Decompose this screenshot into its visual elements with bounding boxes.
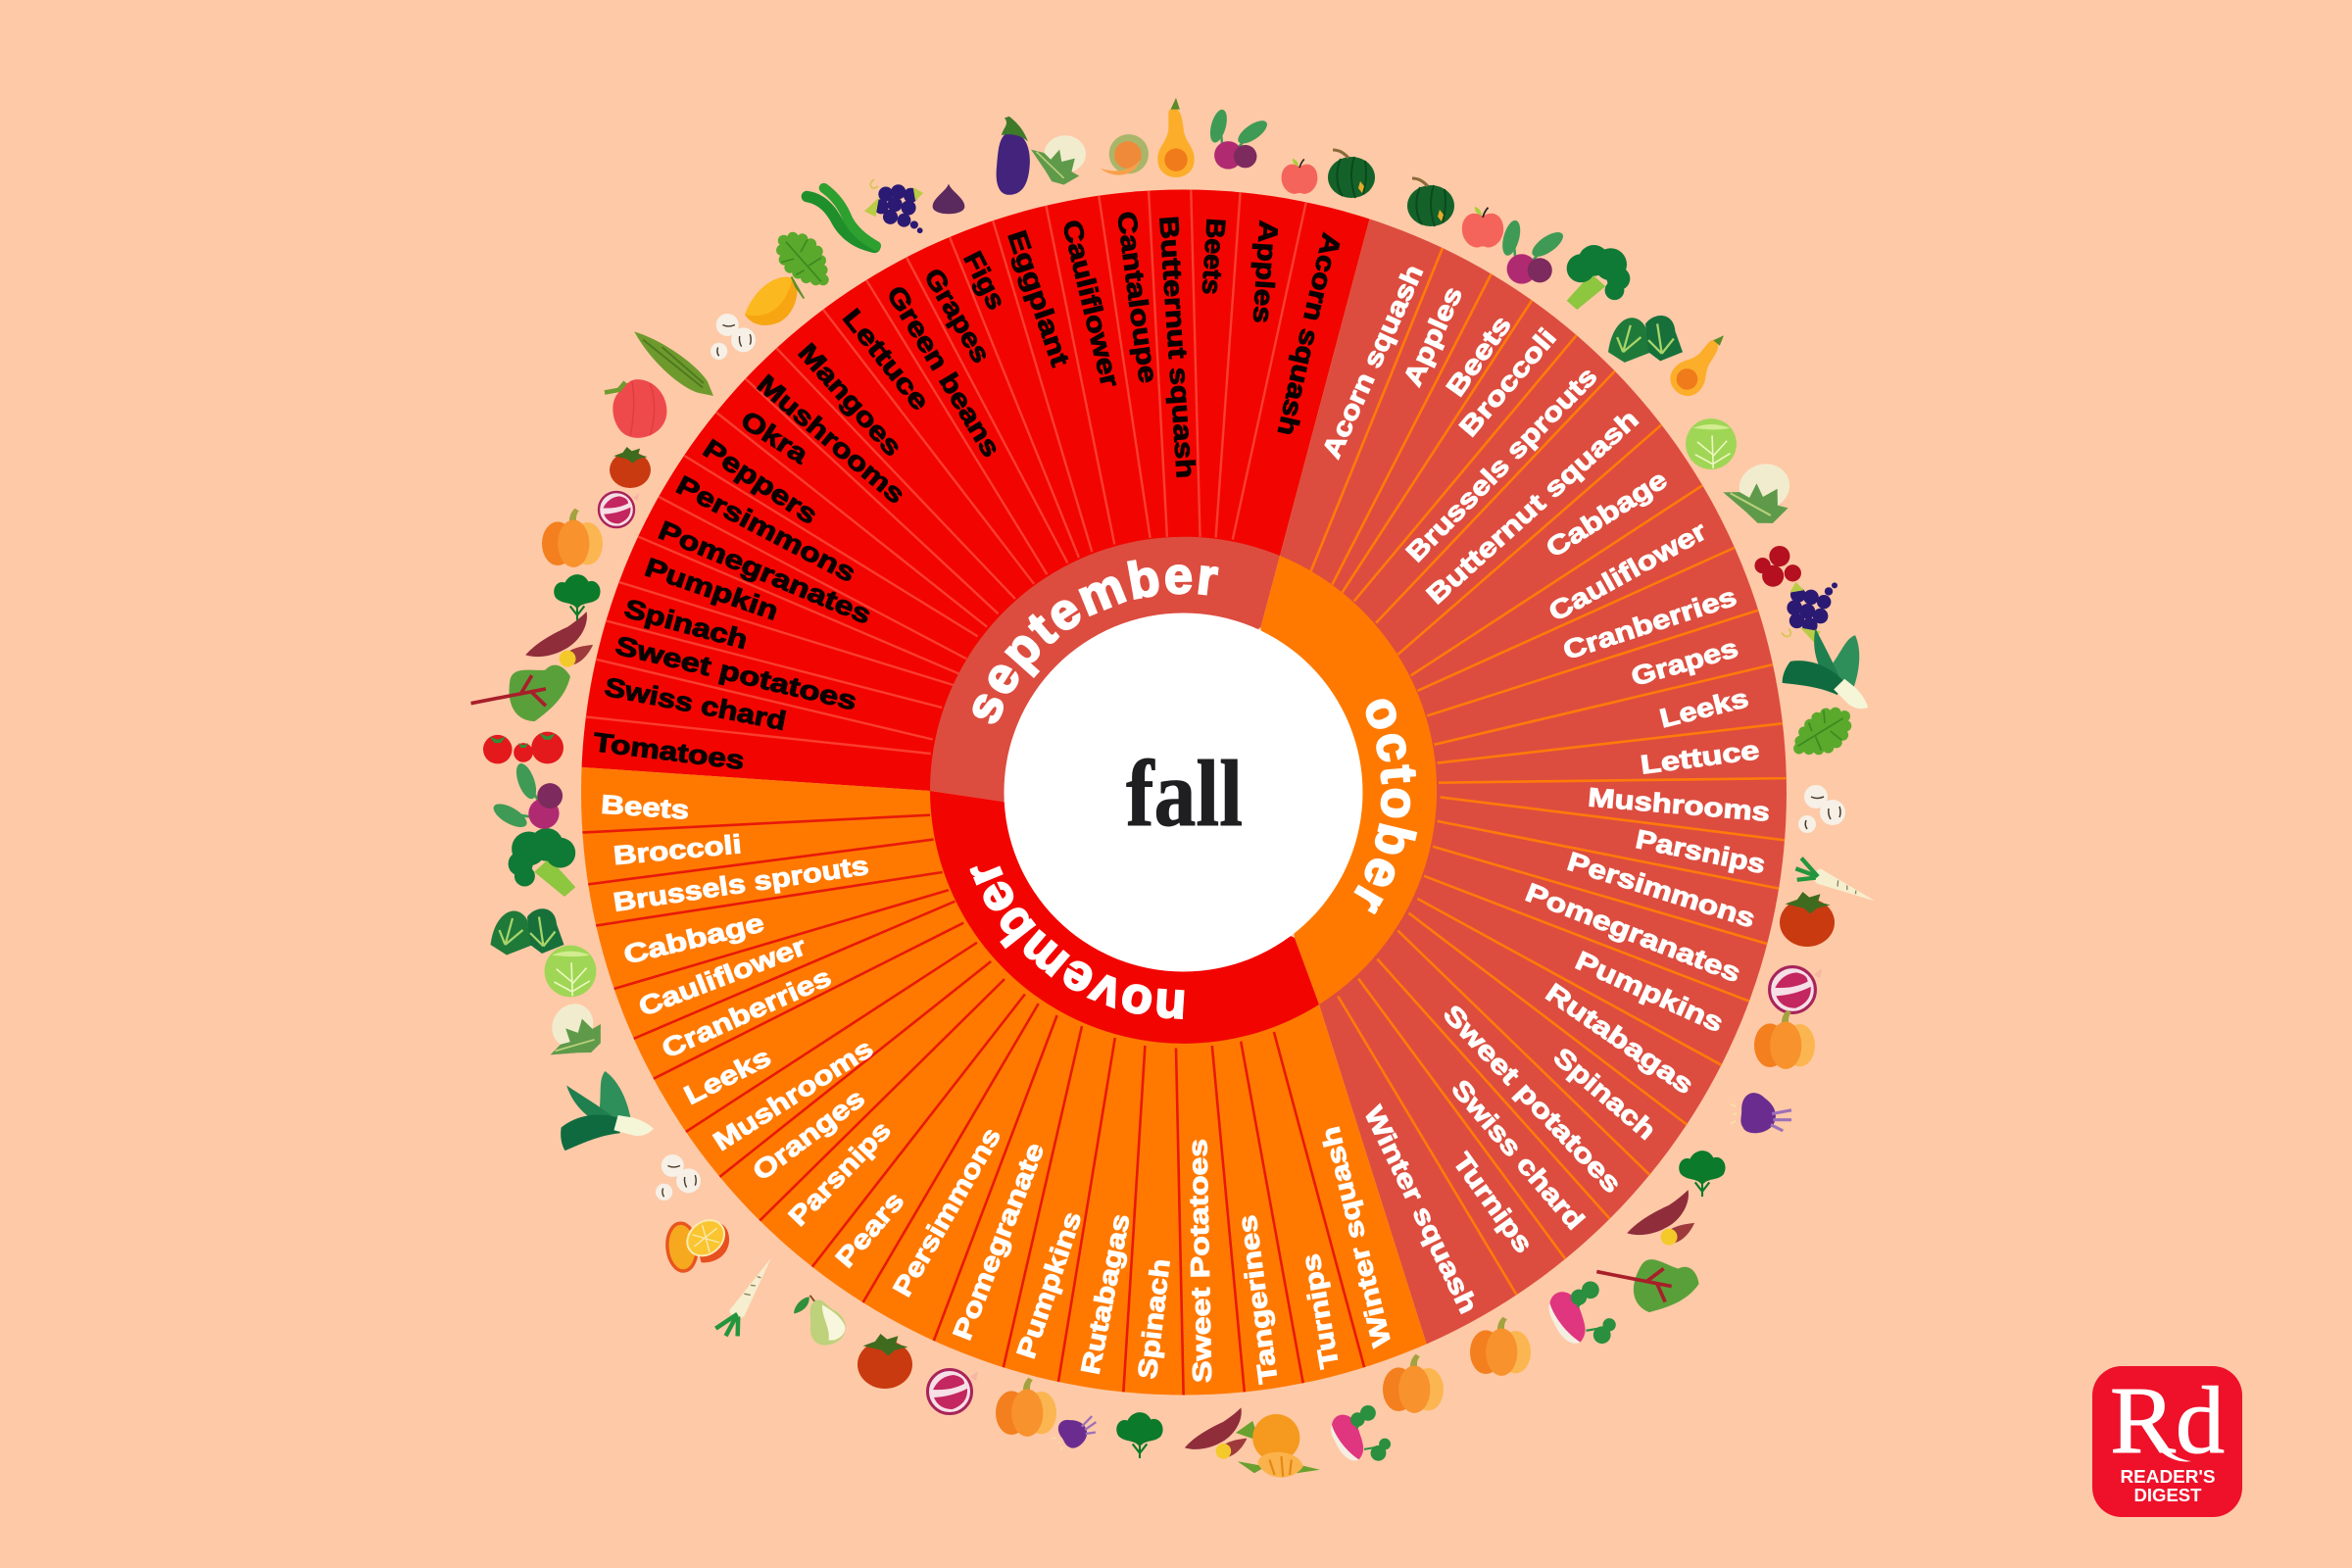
label: Grapes (1628, 633, 1741, 692)
label: Persimmons (887, 1123, 1006, 1301)
icon: swiss chard (1592, 1252, 1701, 1319)
icon: pomegranate (927, 1370, 978, 1413)
icon: rutabaga (1048, 1405, 1102, 1456)
month label: september: september (972, 560, 1219, 724)
icon: apple (1282, 159, 1317, 194)
label: Mangoes (793, 338, 907, 462)
label: Winter squash (1358, 1102, 1484, 1318)
label: Broccoli (612, 829, 743, 870)
icon: pumpkin (542, 509, 603, 567)
icon: cranberries (1754, 546, 1801, 587)
label: Beets (1441, 311, 1517, 402)
month label: october: october (1353, 699, 1417, 915)
label: Lettuce (1639, 735, 1761, 780)
label: Pumpkin (641, 553, 782, 626)
icon: brussels sprouts (490, 908, 564, 955)
icon: turnip (1548, 1281, 1616, 1344)
panel: september wedge (582, 190, 1370, 791)
icon: acorn squash (1407, 178, 1454, 226)
label: Swiss chard (1446, 1074, 1591, 1235)
label: Mushrooms (752, 369, 910, 510)
label: Butternut squash (1153, 216, 1200, 479)
icon: beets (1499, 219, 1567, 284)
label: Oranges (747, 1083, 870, 1187)
label: Persimmons (671, 470, 860, 588)
icon: mango (745, 276, 804, 325)
icon: rutabaga (1731, 1093, 1791, 1133)
logo wordmark line 2: DIGEST (2134, 1486, 2201, 1505)
label: Rutabagas (1541, 977, 1699, 1100)
label: Pomegranate (948, 1139, 1050, 1344)
label: Parsnips (783, 1115, 897, 1232)
november produce labels (600, 790, 1396, 1386)
label: Cauliflower (1544, 515, 1712, 627)
icon: spinach (1679, 1151, 1726, 1197)
label: Pumpkins (1011, 1208, 1087, 1362)
label: Leeks (1657, 683, 1751, 733)
produce icon ring (466, 98, 1893, 1478)
icon: parsnip (714, 1250, 777, 1341)
icon: persimmon (1780, 892, 1835, 947)
label: Tomatoes (592, 727, 746, 775)
icon: sweet potato (1627, 1190, 1694, 1246)
label: Brussels sprouts (1400, 362, 1603, 567)
label: Winter squash (1315, 1124, 1396, 1349)
label: Cranberries (1559, 582, 1740, 665)
label: Figs (957, 247, 1011, 315)
label: Pomegranates (1522, 877, 1744, 988)
icon: pumpkin (996, 1378, 1056, 1437)
icon: beets (1207, 108, 1271, 170)
icon: green beans (807, 188, 876, 247)
icon: sweet potato (1185, 1407, 1247, 1459)
label: Swiss chard (602, 672, 789, 736)
icon: mushrooms (1798, 785, 1845, 833)
label: Peppers (698, 433, 823, 530)
icon: cauliflower (537, 997, 612, 1074)
logo monogram: Rd (2110, 1368, 2225, 1474)
icon: tangerine (1236, 1414, 1320, 1478)
label: Sweet Potatoes (1183, 1139, 1217, 1383)
icon: tomatoes (483, 732, 564, 763)
icon: cantaloupe (1101, 134, 1149, 175)
label: Cantaloupe (1111, 210, 1163, 384)
label: Pears (830, 1186, 909, 1273)
icon: parsnip (1792, 858, 1881, 907)
label: Turnips (1296, 1251, 1345, 1371)
label: Broccoli (1453, 322, 1562, 442)
icon: butternut squash (1664, 324, 1737, 403)
logo badge (2092, 1366, 2242, 1517)
label: Spinach (621, 594, 751, 655)
icon: cabbage (545, 946, 596, 997)
label: Tangerines (1232, 1213, 1283, 1386)
label: Apples (1248, 220, 1284, 324)
label: Cauliflower (1056, 217, 1125, 390)
icon: butternut squash (1157, 98, 1195, 177)
september produce labels (592, 210, 1347, 775)
icon: lettuce (1797, 707, 1848, 756)
logo wordmark line 1: READER'S (2121, 1467, 2215, 1487)
label: Mushrooms (709, 1033, 878, 1156)
icon: acorn squash (1328, 150, 1375, 198)
ring segment: september (930, 537, 1280, 802)
ring segment: october (1260, 556, 1437, 1004)
label: Spinach (1548, 1042, 1661, 1146)
icon: cauliflower (1031, 135, 1086, 185)
panel: november wedge (581, 767, 1427, 1396)
label: Acorn squash (1272, 230, 1347, 438)
icon: grapes (1782, 582, 1838, 643)
label: Brussels sprouts (612, 851, 870, 917)
icon: broccoli (509, 828, 575, 897)
panel: october wedge (1280, 220, 1787, 1345)
icon: pomegranate (1770, 967, 1822, 1012)
label: Apples (1397, 282, 1468, 391)
icon: apple (1462, 207, 1503, 247)
icon: leeks (1780, 614, 1893, 720)
october produce labels (1316, 261, 1771, 1318)
icon: broccoli (1567, 245, 1630, 310)
label: Lettuce (837, 303, 935, 416)
label: Pumpkins (1571, 946, 1728, 1038)
icon: beets (487, 756, 570, 840)
label: Beets (600, 790, 690, 825)
icon: pumpkin (1754, 1010, 1815, 1069)
center circle (1004, 613, 1362, 972)
icon: brussels sprouts (1608, 316, 1683, 363)
label: Cranberries (658, 962, 836, 1064)
produce wheel (581, 190, 1787, 1396)
label: Mushrooms (1587, 782, 1771, 827)
label: Rutabagas (1075, 1211, 1136, 1377)
icon: pomegranate (599, 492, 639, 527)
icon: lettuce (781, 238, 823, 281)
wheel wedges and dividers (581, 190, 1787, 1396)
label: Sweet potatoes (612, 630, 859, 716)
month label: november: november (970, 866, 1184, 1019)
ring segment: november (930, 791, 1319, 1044)
icon: fig (933, 183, 964, 214)
label: Persimmons (1564, 847, 1759, 934)
label: Eggplant (1002, 226, 1075, 369)
icon: pear (790, 1288, 851, 1352)
icon: cabbage (1686, 418, 1737, 469)
label: Cauliflower (635, 931, 810, 1022)
icon: turnip (1331, 1405, 1391, 1461)
label: Leeks (679, 1042, 775, 1110)
label: Butternut squash (1421, 404, 1644, 610)
icon: eggplant (997, 117, 1030, 195)
label: Sweet potatoes (1438, 1000, 1627, 1199)
icon: swiss chard (466, 660, 579, 735)
label: Pomegranates (655, 515, 875, 630)
icon: leeks (556, 1067, 655, 1151)
icon: mushrooms (656, 1154, 701, 1200)
icon: okra (626, 324, 720, 405)
label: Okra (736, 405, 814, 470)
icon: orange (658, 1209, 737, 1277)
label: Spinach (1133, 1257, 1176, 1381)
icon: persimmon (610, 447, 651, 488)
label: Acorn squash (1316, 261, 1429, 463)
label: Beets (1197, 218, 1231, 296)
label: Parsnips (1634, 824, 1768, 879)
icon: mushrooms (710, 314, 756, 360)
label: Cabbage (620, 907, 766, 970)
logo: Reader's Digest (2092, 1366, 2242, 1517)
label: Turnips (1447, 1148, 1539, 1258)
icon: spinach (1116, 1412, 1163, 1458)
label: Green beans (881, 280, 1006, 462)
logo R swash (2144, 1423, 2191, 1461)
label: Grapes (918, 264, 996, 368)
title: fall: fall (1126, 741, 1243, 846)
icon: spinach (554, 574, 601, 620)
icon: sweet potato (525, 612, 593, 667)
icon: pepper (605, 379, 666, 438)
icon: persimmon (858, 1334, 912, 1389)
label: Cabbage (1541, 465, 1672, 564)
icon: pumpkin (1470, 1317, 1531, 1376)
icon: grapes (864, 179, 923, 233)
icon: cauliflower (1719, 459, 1798, 533)
icon: pumpkin (1383, 1354, 1444, 1413)
